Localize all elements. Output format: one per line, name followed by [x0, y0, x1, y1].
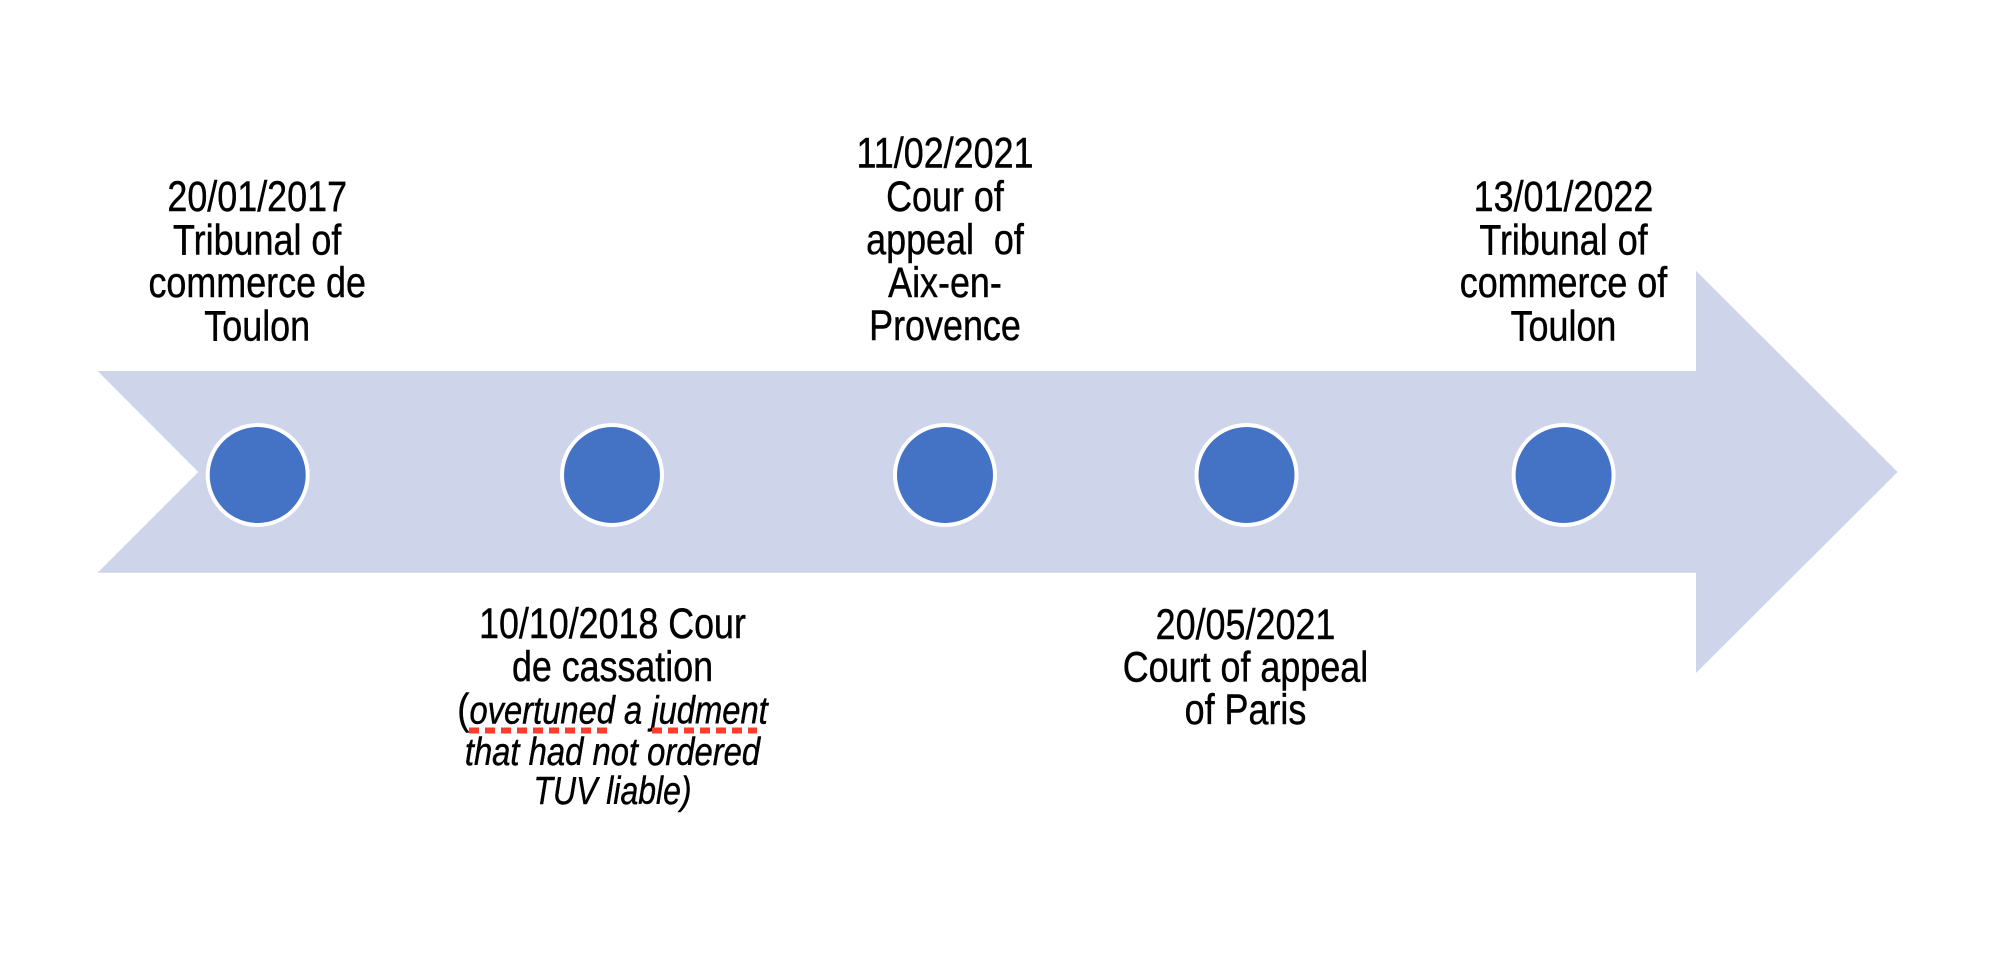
label: 13/01/2022 Tribunal of commerce of Toulon	[1460, 173, 1668, 350]
spell-check underline: overtuned	[469, 728, 607, 734]
timeline arrow	[98, 271, 1898, 673]
label: 20/01/2017 Tribunal of commerce de Toulon	[148, 173, 366, 350]
label: 10/10/2018 Cour de cassation: (overtuned a judment	[457, 686, 770, 733]
label: 13/01/2022 Tribunal of commerce of Toulon: 13/01/2022	[1474, 173, 1653, 221]
marker: 20/01/2017	[208, 425, 308, 525]
label: 20/01/2017 Tribunal of commerce de Toulon: commerce de	[148, 259, 366, 307]
label: 20/01/2017 Tribunal of commerce de Toulon: Toulon	[204, 302, 310, 350]
label: 20/05/2021 Court of appeal of Paris: 20/05/2021	[1156, 601, 1335, 649]
label: 10/10/2018 Cour de cassation: 10/10/2018 Cour	[479, 600, 746, 648]
label: 13/01/2022 Tribunal of commerce of Toulon: Tribunal of	[1479, 216, 1649, 264]
spell-check underline: judment	[652, 728, 757, 734]
label: 11/02/2021 Cour of appeal of Aix-en-Provence: Provence	[869, 302, 1021, 350]
label: 20/01/2017 Tribunal of commerce de Toulon: 20/01/2017	[167, 173, 347, 221]
marker: 20/05/2021	[1196, 425, 1296, 525]
label: 10/10/2018 Cour de cassation: de cassation	[512, 643, 713, 691]
label: 10/10/2018 Cour de cassation: TUV liable)	[534, 770, 691, 813]
label: 13/01/2022 Tribunal of commerce of Toulon: commerce of	[1460, 259, 1668, 307]
label: 20/05/2021 Court of appeal of Paris: of Paris	[1185, 686, 1306, 734]
label: 11/02/2021 Cour of appeal of Aix-en-Provence	[856, 130, 1034, 350]
label: 11/02/2021 Cour of appeal of Aix-en-Provence: Aix-en-	[888, 259, 1002, 307]
label: 11/02/2021 Cour of appeal of Aix-en-Provence: Cour of	[886, 173, 1005, 221]
marker: 13/01/2022	[1514, 425, 1614, 525]
label: 20/01/2017 Tribunal of commerce de Toulon: Tribunal of	[173, 216, 342, 264]
label: 20/05/2021 Court of appeal of Paris	[1123, 601, 1368, 734]
marker: 10/10/2018	[562, 425, 662, 525]
label: 11/02/2021 Cour of appeal of Aix-en-Provence: 11/02/2021	[856, 130, 1034, 177]
label: 10/10/2018 Cour de cassation: that had not ordered	[465, 731, 761, 774]
label: 11/02/2021 Cour of appeal of Aix-en-Provence: appeal of	[866, 216, 1025, 264]
label: 10/10/2018 Cour de cassation	[457, 600, 770, 813]
label: 13/01/2022 Tribunal of commerce of Toulon: Toulon	[1511, 302, 1616, 350]
label: 20/05/2021 Court of appeal of Paris: Court of appeal	[1123, 644, 1368, 691]
marker: 11/02/2021	[895, 425, 995, 525]
